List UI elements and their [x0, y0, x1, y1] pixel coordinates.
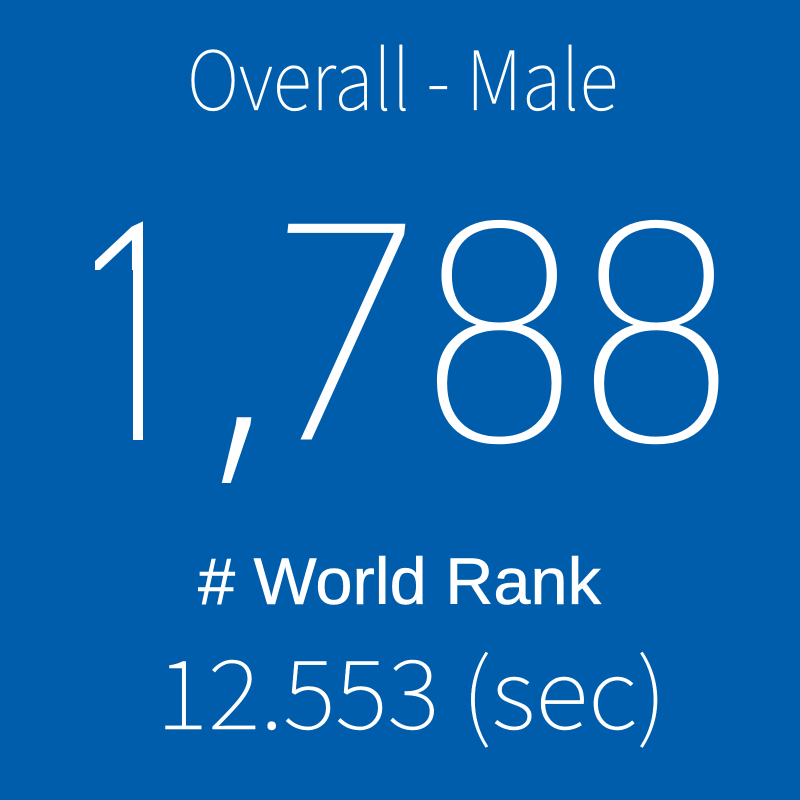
panel: metric card — [95, 44, 718, 748]
main number: 8 — [408, 163, 591, 514]
main number: 1 — [53, 128, 215, 553]
label: world rank: # World Rank — [198, 544, 602, 618]
main number: , — [182, 98, 336, 528]
main number — [95, 220, 718, 483]
main number: 7 — [235, 162, 443, 512]
title: Overall - Male — [187, 15, 618, 134]
main number: 8 — [565, 163, 748, 514]
time value: 12.553 (sec) — [156, 618, 667, 757]
